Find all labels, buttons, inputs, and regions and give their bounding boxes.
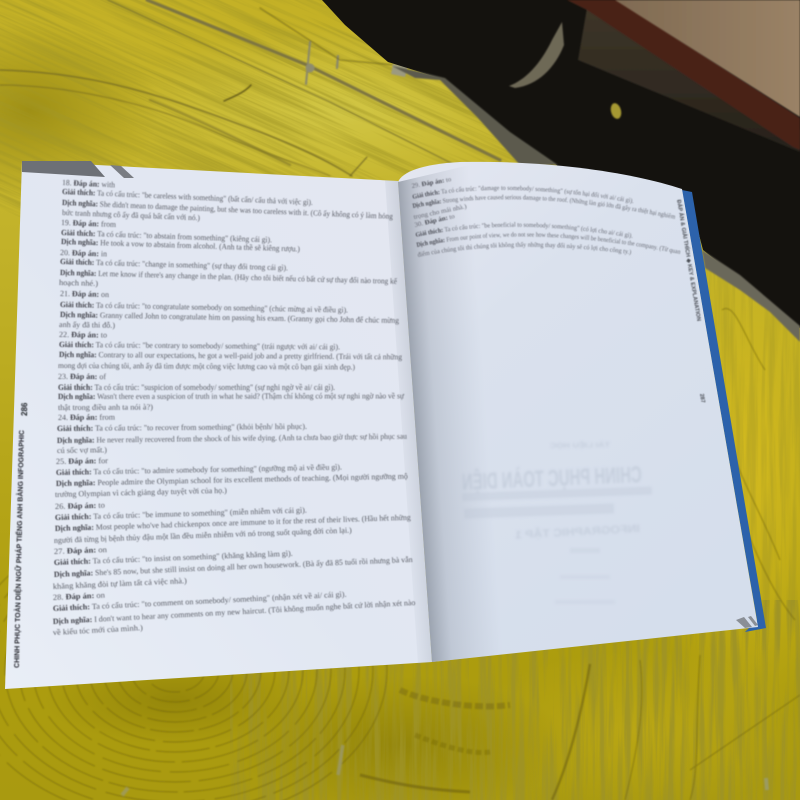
answer 30: điểm của chúng tôi thì chúng tôi không thấy những thay đổi này sẽ có lợi cho công ty.) bbox=[417, 242, 632, 258]
answer 28: 28. Đáp án: on bbox=[53, 591, 105, 602]
answer 30: 30. Đáp án: to bbox=[414, 214, 455, 228]
answer 26 bbox=[54, 501, 411, 545]
weathered wooden board bbox=[615, 0, 800, 117]
answer 21: 21. Đáp án: on bbox=[60, 289, 109, 299]
gutter shading on left page bbox=[385, 180, 432, 664]
answer 26: 26. Đáp án: to bbox=[55, 501, 105, 511]
right page answers bbox=[412, 178, 681, 258]
answer 23: 23. Đáp án: of bbox=[58, 372, 106, 381]
answer 22: Dịch nghĩa: Contrary to all our expectations, he got a well-paid job and a pretty girlfriend. (Trái với tất cả những bbox=[59, 350, 402, 361]
answer 25: 25. Đáp án: for bbox=[56, 456, 108, 466]
concrete ledge in shadow bbox=[578, 8, 800, 152]
show-through text from the back of the right page: INFOGRAPHIC TẬP 1 bbox=[515, 522, 640, 542]
small yellow fruit bbox=[609, 102, 623, 120]
answer 20: Giải thích: Ta có cấu trúc: "change in something" (sự thay đổi trong cái gì). bbox=[60, 257, 288, 272]
answer 21: Dịch nghĩa: Granny called John to congratulate him on passing his exam. (Granny gọi cho John để chúc mừng bbox=[60, 310, 399, 325]
answer 30 bbox=[414, 214, 681, 258]
answer 27: Dịch nghĩa: She's 85 now, but she still insist on doing all her own housework. (Bà ấy đã 85 tuổi rồi nhưng bà vẫn bbox=[54, 555, 413, 579]
answer 27: 27. Đáp án: on bbox=[54, 545, 107, 556]
header banner second stripe bbox=[110, 165, 134, 178]
answer 18: Dịch nghĩa: She didn't mean to damage the painting, but she was too careless with it. (Cô ấy không có ý làm hỏng bbox=[62, 198, 393, 221]
answer 24: Giải thích: Ta có cấu trúc: "to recover from something" (khỏi bệnh/ hồi phục). bbox=[57, 422, 307, 433]
answer 28 bbox=[53, 590, 416, 637]
blue book cover bbox=[682, 190, 766, 632]
answer 23 bbox=[58, 372, 405, 412]
grey bark edge, upper bbox=[392, 66, 558, 165]
answer 25 bbox=[55, 456, 408, 499]
answer 21: anh ấy đã thi đỗ.) bbox=[59, 320, 115, 330]
wood rings on lower log bbox=[0, 308, 800, 800]
dried leaf on the ground bbox=[509, 22, 564, 88]
answer 18 bbox=[62, 178, 393, 222]
show-through text from the back of the right page: CHINH PHỤC TOÀN DIỆN bbox=[461, 460, 642, 495]
page number 287: 287 bbox=[698, 393, 705, 403]
answer 21 bbox=[59, 289, 399, 330]
show-through text from the back of the right page: TÀI LIỆU HỌC bbox=[550, 440, 610, 450]
answer 19 bbox=[61, 218, 300, 254]
answer 30: Giải thích: Ta có cấu trúc: "be beneficial to somebody/ something" (có lợi cho ai/ cái gì). bbox=[415, 222, 633, 239]
answer 19: Dịch nghĩa: He took a vow to abstain from alcohol. (Anh ta thề sẽ kiêng rượu.) bbox=[61, 237, 300, 254]
answer 29 bbox=[412, 178, 676, 220]
answer 29: Giải thích: Ta có cấu trúc: "damage to somebody/ something" (sự tổn hại đối với ai/ cái gì). bbox=[412, 185, 634, 204]
answer 24 bbox=[57, 413, 407, 455]
answer 20 bbox=[59, 248, 397, 288]
answer 21: Giải thích: Ta có cấu trúc: "to congratulate somebody on something" (chúc mừng ai về điều gì). bbox=[60, 300, 348, 315]
corner stripes, right page bbox=[736, 616, 758, 628]
answer 19: Giải thích: Ta có cấu trúc: "to abstain from something" (kiêng cái gì). bbox=[61, 228, 272, 244]
answer 27 bbox=[53, 545, 413, 591]
show-through text from the back of the right page bbox=[461, 440, 652, 604]
answer 25: trường Olympian vì cách giảng dạy tuyệt vời của họ.) bbox=[55, 486, 227, 499]
answer 25: Dịch nghĩa: People admire the Olympian school for its excellent methods of teaching. (Mọi người ngưỡng mộ bbox=[56, 472, 408, 488]
answer 27: khăng khăng đòi tự làm tất cả việc nhà.) bbox=[53, 576, 187, 591]
answer 28: Dịch nghĩa: I don't want to hear any comments on my new haircut. (Tôi không muốn nghe bất cứ lời nhận xét nào bbox=[53, 598, 416, 626]
answer 29: trọng cho mái nhà.) bbox=[413, 204, 467, 220]
wood scratches on upper log bbox=[0, 0, 500, 176]
header banner grey strip bbox=[22, 161, 105, 177]
answer 28: về kiểu tóc mới của mình.) bbox=[53, 623, 143, 637]
open book bbox=[5, 161, 766, 689]
answer 20: 20. Đáp án: in bbox=[60, 248, 107, 258]
answer 19: 19. Đáp án: from bbox=[61, 218, 117, 229]
answer 26: Dịch nghĩa: Most people who've had chickenpox once are immune to it for the rest of their lives. (Hầu hết những bbox=[55, 513, 411, 533]
left page answers bbox=[53, 178, 416, 637]
answer 27: Giải thích: Ta có cấu trúc: "to insist on something" (khăng khăng làm gì). bbox=[54, 549, 293, 567]
answer 18: bức tranh nhưng cô ấy đã quá bất cẩn với nó.) bbox=[62, 208, 200, 222]
answer 22: mong đợi của chúng tôi, anh ấy đã tìm được một công việc lương cao và một cô bạn gái xinh đẹp.) bbox=[58, 361, 355, 372]
running title, right page: ĐÁP ÁN & GIẢI THÍCH ◆ KEY & EXPLANATION bbox=[675, 199, 703, 322]
answer 23: Giải thích: Ta có cấu trúc: "suspicion of somebody/ something" (sự nghi ngờ về ai/ cái gì). bbox=[58, 383, 335, 392]
gutter shadow bbox=[398, 165, 505, 662]
answer 25: Giải thích: Ta có cấu trúc: "to admire somebody for something" (ngưỡng mộ ai về điều gì). bbox=[56, 463, 342, 477]
grey bark edge, right bbox=[702, 250, 800, 342]
answer 24: 24. Đáp án: from bbox=[58, 413, 116, 422]
right page bbox=[398, 162, 758, 662]
answer 26: Giải thích: Ta có cấu trúc: "be immune to something" (miễn nhiễm với cái gì). bbox=[55, 506, 307, 522]
answer 24: cú sốc vợ mất.) bbox=[57, 445, 107, 455]
answer 22 bbox=[58, 330, 402, 372]
answer 20: hoạch nhé.) bbox=[59, 278, 98, 288]
running title, left page: CHINH PHỤC TOÀN DIỆN NGỮ PHÁP TIẾNG ANH BẰNG INFOGRAPHIC bbox=[11, 429, 26, 668]
answer 24: Dịch nghĩa: He never really recovered from the shock of his wife dying. (Anh ta chưa bao giờ thực sự hồi phục sau bbox=[57, 432, 407, 445]
answer 30: Dịch nghĩa: From our point of view, we do not see how these changes will be beneficial to the company. (Từ quan bbox=[416, 232, 681, 254]
answer 23: Dịch nghĩa: Wasn't there even a suspicion of truth in what he said? (Thậm chí không có một sự nghi ngờ nào về sự bbox=[58, 391, 405, 401]
answer 18: 18. Đáp án: with bbox=[62, 178, 115, 189]
page number 286: 286 bbox=[20, 402, 29, 416]
red-brown wooden beam bbox=[567, 0, 800, 150]
left page bbox=[5, 161, 432, 689]
answer 29: 29. Đáp án: to bbox=[412, 178, 452, 188]
answer 20: Dịch nghĩa: Let me know if there's any change in the plan. (Hãy cho tôi biết nếu có bất cứ sự thay đổi nào trong kế bbox=[60, 268, 397, 286]
answer 26: người đã từng bị bệnh thủy đậu một lần đều miễn nhiễm với nó trong suốt quãng đời còn lại.) bbox=[54, 526, 352, 545]
answer 23: thật trong điều anh ta nói à?) bbox=[58, 403, 153, 412]
answer 22: Giải thích: Ta có cấu trúc: "be contrary to somebody/ something" (trái ngược với ai/ cái gì). bbox=[59, 340, 340, 351]
answer 18: Giải thích: Ta có cấu trúc: "be careless with something" (bất cẩn/ cẩu thả với việc gì). bbox=[62, 187, 313, 207]
answer 29: Dịch nghĩa: Strong winds have caused serious damage to the roof. (Những làn gió lớn đã gây ra thiệt hại nghiêm bbox=[412, 194, 676, 220]
answer 22: 22. Đáp án: to bbox=[59, 330, 107, 340]
answer 28: Giải thích: Ta có cấu trúc: "to comment on somebody/ something" (nhận xét về ai/ cái gì). bbox=[53, 590, 347, 613]
dark ground behind the log bbox=[322, 0, 800, 328]
